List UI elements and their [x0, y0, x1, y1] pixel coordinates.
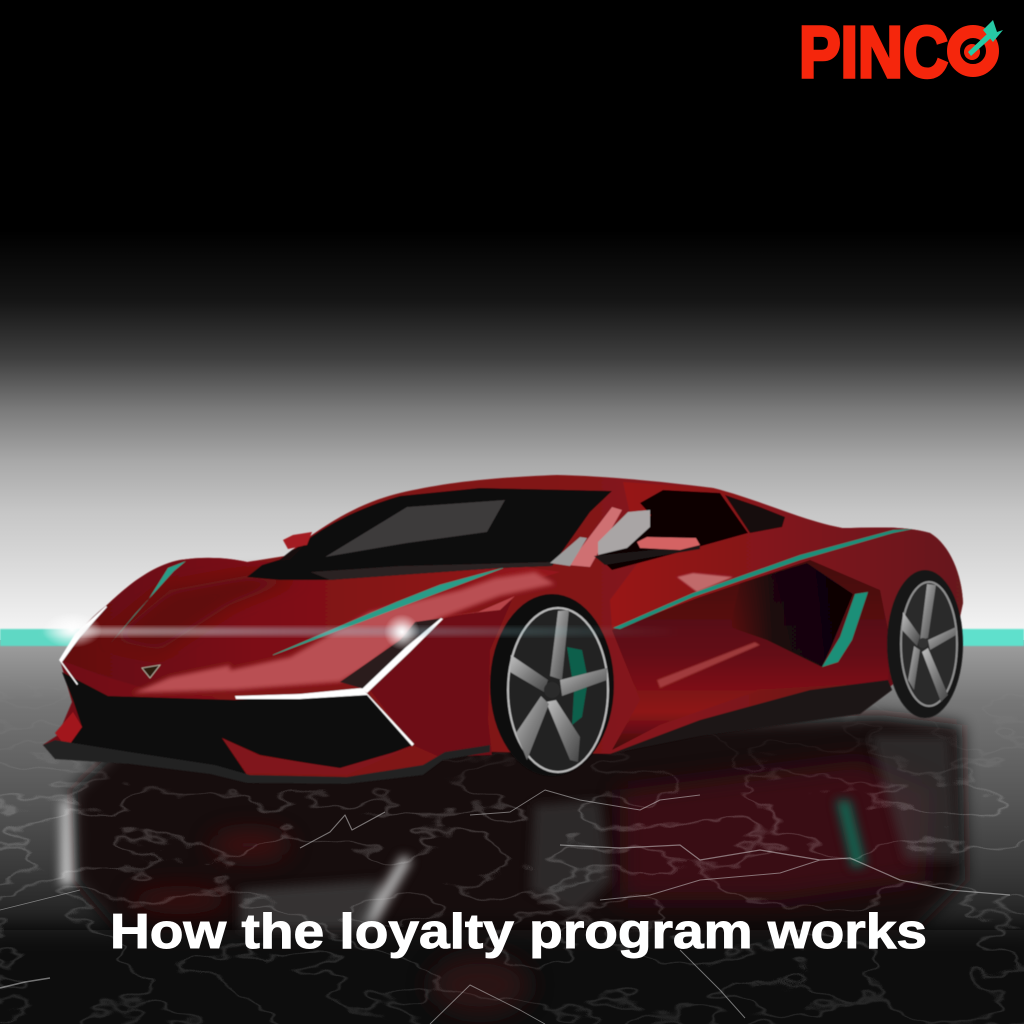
rear hub [918, 638, 928, 648]
side crease highlight [657, 642, 760, 688]
side intake teal blade [822, 592, 868, 667]
left lens flare [42, 612, 102, 648]
left mirror cap [283, 532, 312, 549]
hood [60, 558, 560, 693]
logo letters: PINC [799, 13, 948, 93]
brake caliper [567, 647, 588, 725]
teal horizon glow: right [960, 629, 1024, 646]
headlight daytime light right [235, 688, 414, 746]
sports car [43, 475, 963, 784]
left mirror arm [278, 545, 305, 561]
fender behind headlight [370, 600, 512, 757]
grey seat reflection rear [598, 510, 650, 555]
hood teal stripe left [110, 561, 186, 644]
hood shadow fold [110, 575, 300, 650]
front splitter [43, 740, 490, 784]
side air intake [730, 563, 853, 667]
windshield reflection [325, 500, 505, 557]
marble floor [0, 640, 1024, 1024]
reflection: red body [130, 760, 930, 1015]
side teal stripe [613, 529, 913, 629]
reflection: wheels and lights [60, 735, 958, 930]
right mirror [594, 537, 700, 565]
front hub [544, 682, 560, 698]
cowl panel [310, 562, 552, 580]
rear quarter window [725, 495, 785, 533]
front grille [62, 672, 413, 775]
right mirror arm [594, 545, 700, 565]
cabin glass [247, 488, 612, 580]
left front intake red [55, 712, 82, 748]
side window [597, 490, 748, 570]
front rim [508, 608, 608, 772]
headlight left light line [59, 606, 107, 685]
logo [799, 13, 1003, 93]
logo target ring [954, 32, 992, 70]
background wall gradient [0, 0, 1024, 640]
car body silhouette [43, 475, 963, 783]
side sill dark [610, 680, 892, 754]
front tyre [490, 594, 614, 776]
headlight lens flare [384, 614, 420, 650]
right mirror cap [637, 537, 700, 550]
upper rear haunch [610, 482, 963, 640]
hood pink reflection [133, 572, 555, 693]
car shadow on floor [72, 715, 965, 945]
logo target centre [964, 44, 980, 60]
teal horizon glow: left [0, 629, 80, 646]
rear rim [901, 582, 957, 706]
rear wheel [887, 570, 963, 718]
front spokes [510, 610, 607, 762]
left mirror [278, 532, 312, 561]
rear spokes [902, 584, 956, 702]
headlight upper light line [362, 618, 443, 693]
A pillar pink [568, 507, 622, 567]
marble veins [0, 790, 1010, 1024]
marble texture [0, 735, 1024, 1024]
lower side panel [612, 560, 890, 750]
fender crease [445, 596, 515, 616]
hood teal stripe right [273, 568, 503, 655]
rear tyre [887, 570, 963, 718]
hood badge [142, 665, 160, 678]
title: How the loyalty program works [110, 905, 927, 959]
headlight upper lens [340, 618, 443, 689]
front wheel [490, 594, 614, 776]
grey seat reflection front [550, 537, 587, 566]
dark lower floor [0, 930, 1024, 1024]
logo arrow [968, 20, 1003, 56]
lower front intake [222, 738, 412, 775]
rear shoulder highlight [677, 573, 733, 592]
lens flare streak [40, 627, 680, 636]
